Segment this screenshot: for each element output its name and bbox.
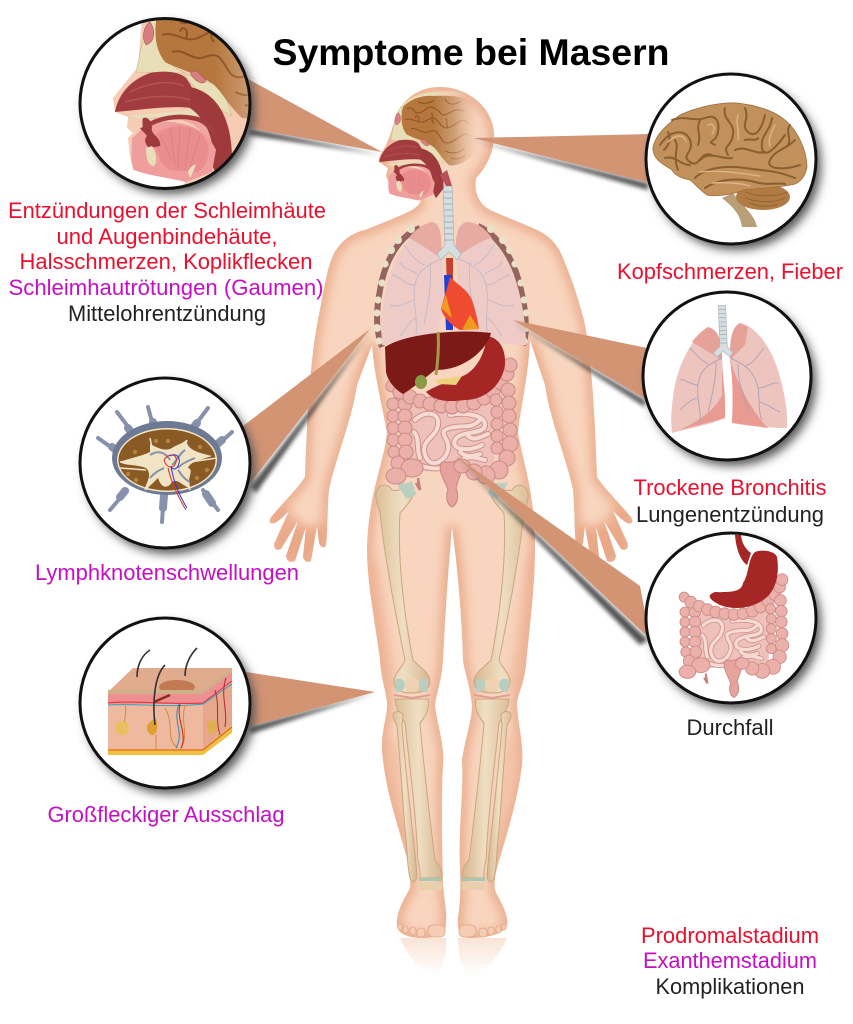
legend	[641, 923, 819, 999]
circle: brain	[646, 74, 821, 250]
pale medulla	[120, 440, 212, 490]
head cross-section	[379, 93, 486, 200]
text: lymph node swelling: Lymphknotenschwellungen	[35, 560, 299, 585]
legend: Prodromalstadium	[641, 923, 819, 948]
circle: stomach and intestines	[646, 533, 821, 709]
text: upper-left symptoms: Schleimhautrötungen (Gaumen)	[8, 275, 324, 300]
stomach	[426, 336, 505, 401]
pancreas	[436, 376, 462, 385]
small windpipe	[713, 305, 733, 357]
human body figure	[270, 87, 632, 975]
text: upper-left symptoms: und Augenbindehäute,	[56, 224, 278, 249]
lung illustration	[671, 323, 787, 433]
legend: Komplikationen	[656, 974, 804, 999]
lymph node illustration	[98, 407, 232, 522]
circle: nose and throat	[78, 16, 262, 202]
intestines illustration	[679, 574, 789, 698]
lungs with ribs	[373, 222, 530, 347]
skin block illustration	[108, 648, 232, 755]
text: headache and fever: Kopfschmerzen, Fieber	[617, 259, 843, 284]
callout wedge: intestines	[456, 456, 650, 645]
text: rash: Großfleckiger Ausschlag	[48, 802, 284, 827]
text: upper-left symptoms: Entzündungen der Schleimhäute	[8, 198, 326, 223]
heart	[441, 258, 479, 330]
callout wedge: lymph nodes	[243, 329, 370, 493]
circle: lymph node	[80, 378, 255, 554]
circle: skin	[80, 618, 255, 794]
skin of head	[113, 22, 248, 184]
text: bronchitis and pneumonia: Lungenentzündung	[636, 502, 824, 527]
intestines	[386, 358, 518, 507]
liver	[385, 332, 491, 394]
text: upper-left symptoms	[8, 198, 326, 326]
stomach and oesophagus	[710, 535, 778, 608]
left leg bones	[376, 481, 442, 890]
body silhouette	[270, 87, 632, 938]
callout wedge: nose to upper-left circle	[248, 79, 382, 155]
text: upper-left symptoms: Mittelohrentzündung	[68, 301, 266, 326]
circle: lungs	[643, 292, 816, 466]
title: Symptome bei Masern	[272, 32, 670, 73]
bile duct and gallbladder	[415, 332, 438, 389]
callout wedge: skin	[246, 672, 375, 734]
text: diarrhoea: Durchfall	[686, 715, 774, 740]
text: bronchitis and pneumonia: Trockene Bronchitis	[634, 475, 826, 500]
callout wedge: brain	[473, 134, 650, 190]
legend: Exanthemstadium	[643, 948, 817, 973]
windpipe	[437, 186, 461, 260]
toes	[398, 924, 506, 937]
brain illustration	[653, 103, 807, 227]
right leg bones	[462, 481, 528, 890]
foot reflection	[400, 938, 507, 975]
text: bronchitis and pneumonia	[634, 475, 826, 527]
callout wedge: lungs	[513, 320, 647, 407]
throat	[440, 170, 452, 186]
text: upper-left symptoms: Halsschmerzen, Koplikflecken	[20, 249, 312, 274]
